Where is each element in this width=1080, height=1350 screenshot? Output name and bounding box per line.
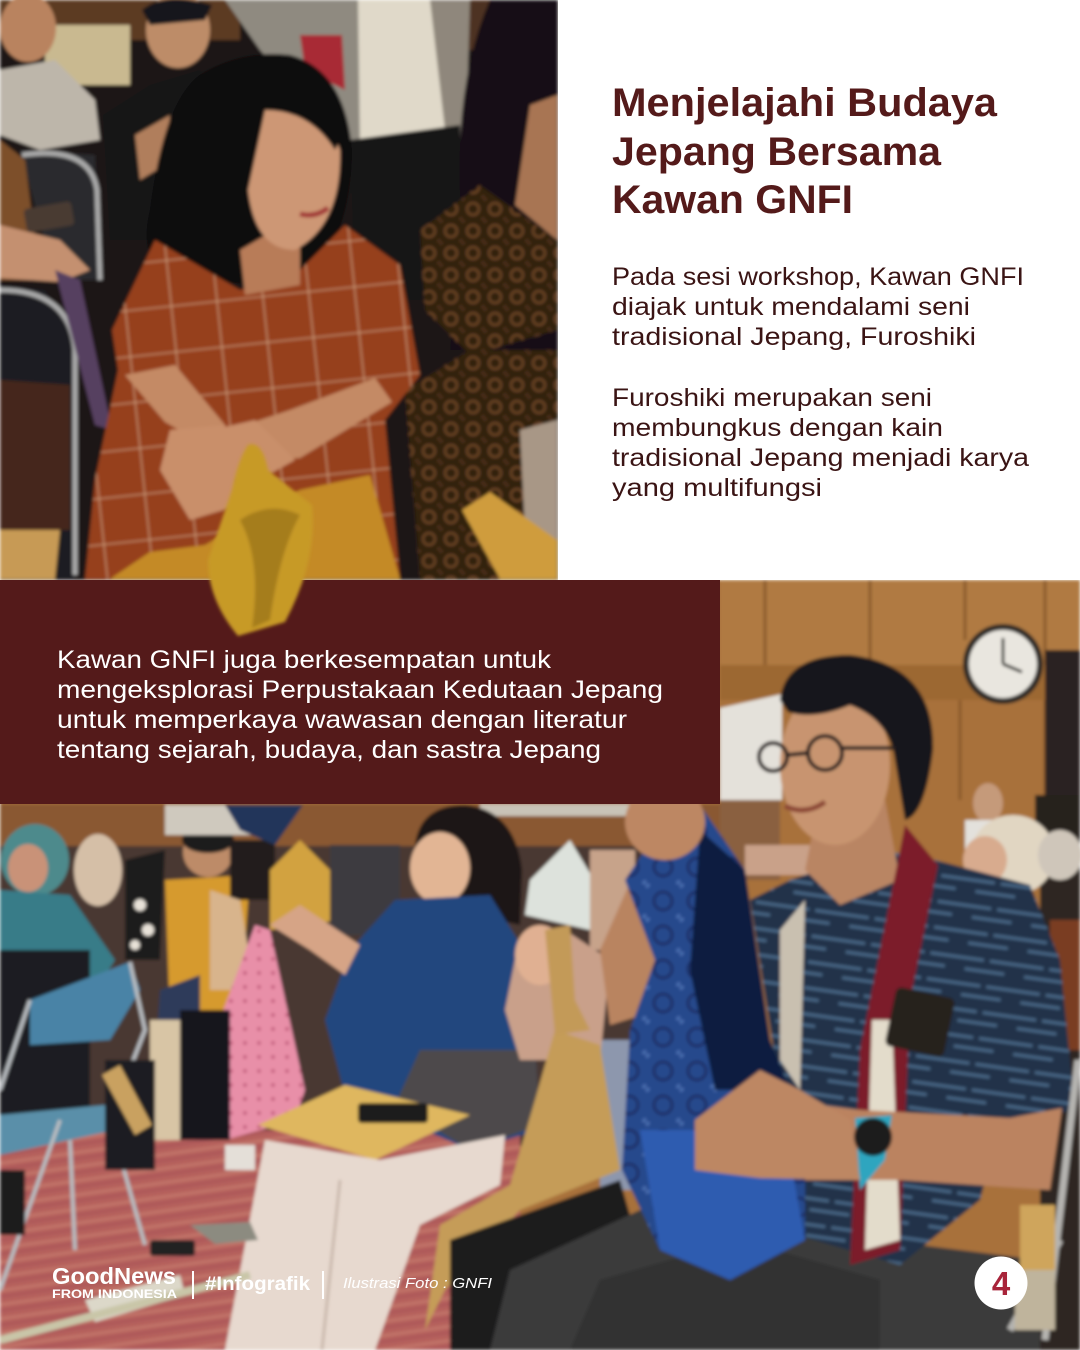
- woman: hair back: [147, 54, 352, 290]
- paragraph: furoshiki: membungkus dengan kain: [612, 414, 943, 442]
- envelope: [258, 1085, 470, 1160]
- woman in batik jacket: [223, 0, 362, 144]
- man in black shirt: [146, 0, 210, 68]
- hand gripping bag: [623, 804, 708, 863]
- paragraph: furoshiki: [612, 384, 1029, 502]
- paragraph: library: mengeksplorasi Perpustakaan Kedutaan Jepang: [57, 676, 663, 704]
- paragraph: library: tentang sejarah, budaya, dan sastra Jepang: [57, 736, 601, 764]
- man shirt: [750, 850, 1075, 1265]
- scarf lanyard: [850, 825, 938, 1265]
- paragraph: workshop: [612, 263, 1024, 351]
- paragraph: library: [57, 646, 663, 764]
- arms: [124, 363, 226, 430]
- page number badge: [974, 1256, 1028, 1310]
- man face and neck: [805, 800, 900, 905]
- furoshiki knot bag overlapping panel: [208, 444, 313, 636]
- photo: woman in rust dress holding furoshiki bag: [0, 0, 558, 580]
- photo credit: Ilustrasi Foto : GNFI: [343, 1275, 492, 1292]
- paragraph: furoshiki: Furoshiki merupakan seni: [612, 384, 932, 412]
- left arm: [598, 888, 658, 1027]
- photo: workshop crowd with man holding furoshiki: [0, 580, 1080, 1350]
- paragraph: furoshiki: tradisional Jepang menjadi karya: [612, 444, 1029, 472]
- title: Jepang Bersama: [612, 130, 942, 174]
- dark person lower: [450, 1180, 640, 1350]
- paragraph: library: Kawan GNFI juga berkesempatan untuk: [57, 646, 552, 674]
- man top left: [0, 0, 56, 62]
- floor cables and power strip: [85, 1275, 185, 1322]
- chair and left person: [20, 150, 100, 280]
- page number badge: 4: [992, 1265, 1011, 1302]
- yellow pants: [110, 475, 400, 579]
- dark red text panel: [0, 580, 720, 804]
- pink furoshiki bag: [221, 922, 308, 1140]
- footer logo: [52, 1263, 177, 1301]
- paragraph: workshop: Pada sesi workshop, Kawan GNFI: [612, 263, 1024, 291]
- background people right: [1033, 793, 1080, 844]
- hand over bag: [695, 1070, 860, 1180]
- chair right: [1010, 1060, 1078, 1340]
- footer divider and hashtag: [192, 1271, 324, 1299]
- paragraph: workshop: tradisional Jepang, Furoshiki: [612, 323, 976, 351]
- face: [248, 105, 340, 250]
- man forearm: [780, 1100, 1062, 1190]
- crowd left: [1, 824, 69, 896]
- tan scarf: [425, 1030, 620, 1330]
- blue furoshiki: [620, 808, 807, 1248]
- dress: [85, 225, 420, 579]
- title: Kawan GNFI: [612, 178, 853, 222]
- woman mid scarf: [505, 930, 610, 1060]
- clock: [963, 624, 1043, 704]
- title: Menjelajahi Budaya: [612, 81, 998, 125]
- footer logo: GoodNews: [52, 1263, 176, 1289]
- paragraph: furoshiki: yang multifungsi: [612, 474, 822, 502]
- neck: [236, 234, 304, 296]
- blue chair: [30, 962, 140, 1045]
- hijab woman and batik sleeves: [450, 0, 557, 350]
- paragraph: workshop: diajak untuk mendalami seni: [612, 293, 970, 321]
- footer divider and hashtag: #Infografik: [205, 1274, 310, 1295]
- white trousers: [225, 1135, 505, 1350]
- paragraph: library: untuk memperkaya wawasan dengan literatur: [57, 706, 627, 734]
- woman in blue kimono: [415, 805, 522, 925]
- footer logo: FROM INDONESIA: [52, 1287, 177, 1301]
- title: [612, 81, 998, 222]
- glasses: [759, 736, 895, 771]
